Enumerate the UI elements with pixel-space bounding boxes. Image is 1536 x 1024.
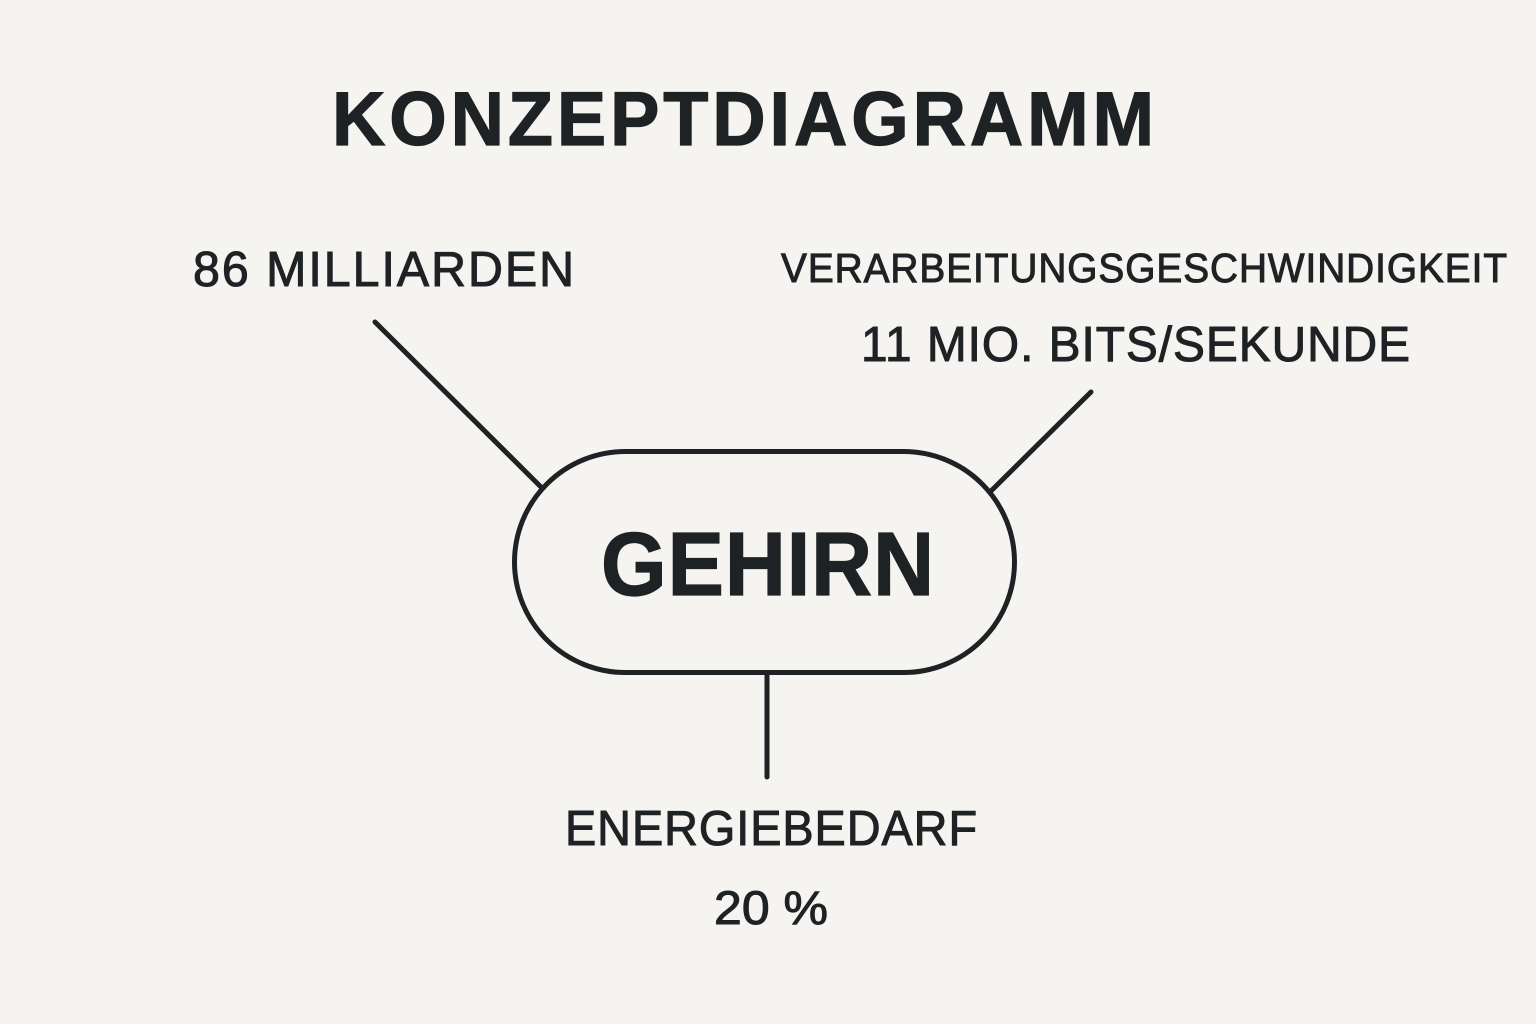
label: 86 Milliarden: 86 MILLIARDEN <box>193 243 576 297</box>
connector: bottom <box>764 674 770 777</box>
connector: top right <box>990 392 1091 492</box>
label: 20 %: 20 % <box>714 881 828 934</box>
label: Energiebedarf: ENERGIEBEDARF <box>565 802 978 856</box>
central node: Gehirn: GEHIRN <box>601 515 935 615</box>
title: KONZEPTDIAGRAMM <box>332 77 1158 162</box>
connector: top left <box>375 322 542 488</box>
central node: Gehirn <box>514 452 1014 672</box>
label: Verarbeitungsgeschwindigkeit: VERARBEITUNGSGESCHWINDIGKEIT <box>781 245 1508 291</box>
label: 11 Mio. Bits/Sekunde: 11 MIO. BITS/SEKUNDE <box>861 318 1411 372</box>
